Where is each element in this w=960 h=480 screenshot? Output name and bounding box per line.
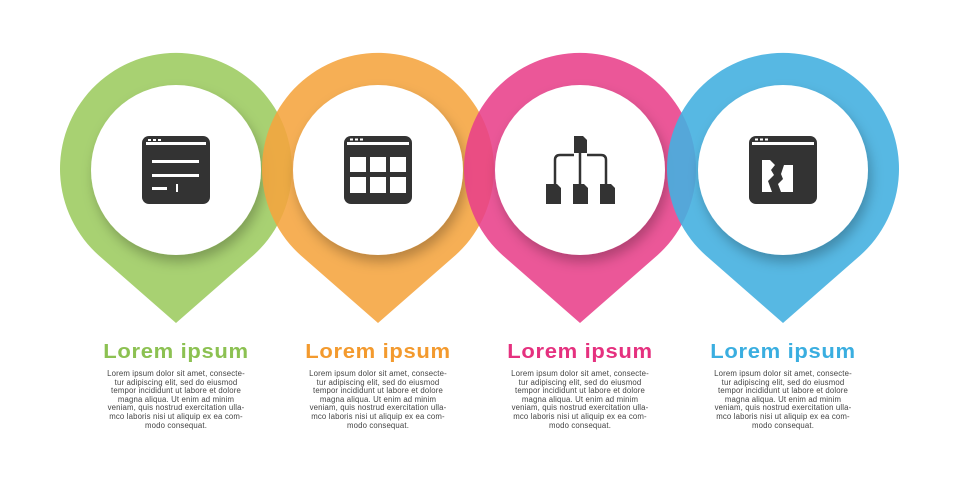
text: green [103, 341, 249, 430]
text: orange: tempor incididunt ut labore et dolore [313, 386, 443, 395]
text: green: tempor incididunt ut labore et dolore [111, 386, 241, 395]
text: pink: magna aliqua. Ut enim ad minim [522, 395, 638, 404]
text: green: modo consequat. [145, 421, 207, 430]
text: blue: mco laboris nisi ut aliquip ex ea com- [716, 412, 850, 421]
text: orange: veniam, quis nostrud exercitation ulla- [310, 403, 446, 412]
text: orange: Lorem ipsum dolor sit amet, consecte- [309, 369, 447, 378]
text: orange: modo consequat. [347, 421, 409, 430]
text: pink: mco laboris nisi ut aliquip ex ea com- [513, 412, 647, 421]
text: green: Lorem ipsum dolor sit amet, consecte- [107, 369, 245, 378]
text: blue: tempor incididunt ut labore et dolore [718, 386, 848, 395]
text: blue: Lorem ipsum [710, 341, 856, 363]
icon: browser text [142, 136, 210, 204]
text: pink: tur adipiscing elit, sed do eiusmod [519, 378, 641, 387]
pin: pink [464, 53, 696, 323]
text: green: Lorem ipsum [103, 341, 249, 363]
text: orange [305, 341, 451, 430]
text: green: tur adipiscing elit, sed do eiusmod [115, 378, 237, 387]
text: orange: mco laboris nisi ut aliquip ex ea com- [311, 412, 445, 421]
text: green: magna aliqua. Ut enim ad minim [118, 395, 234, 404]
text: pink [507, 341, 653, 430]
text: blue: Lorem ipsum dolor sit amet, consecte- [714, 369, 852, 378]
text: orange: magna aliqua. Ut enim ad minim [320, 395, 436, 404]
text: pink: veniam, quis nostrud exercitation ulla- [512, 403, 648, 412]
text: pink: modo consequat. [549, 421, 611, 430]
text: blue: magna aliqua. Ut enim ad minim [725, 395, 841, 404]
text: green: veniam, quis nostrud exercitation ulla- [108, 403, 244, 412]
pin: blue [667, 53, 899, 323]
text: pink: tempor incididunt ut labore et dolore [515, 386, 645, 395]
text: green: mco laboris nisi ut aliquip ex ea com- [109, 412, 243, 421]
text: blue: tur adipiscing elit, sed do eiusmod [722, 378, 844, 387]
pin: orange [262, 53, 494, 323]
icon: browser grid [344, 136, 412, 204]
text: blue [710, 341, 856, 430]
text: pink: Lorem ipsum [507, 341, 653, 363]
icon: file hierarchy [546, 136, 615, 204]
text: blue: veniam, quis nostrud exercitation ulla- [715, 403, 851, 412]
pin: green [60, 53, 292, 323]
text: orange: tur adipiscing elit, sed do eiusmod [317, 378, 439, 387]
icon: broken browser [749, 136, 817, 204]
text: orange: Lorem ipsum [305, 341, 451, 363]
text: blue: modo consequat. [752, 421, 814, 430]
text: pink: Lorem ipsum dolor sit amet, consecte- [511, 369, 649, 378]
